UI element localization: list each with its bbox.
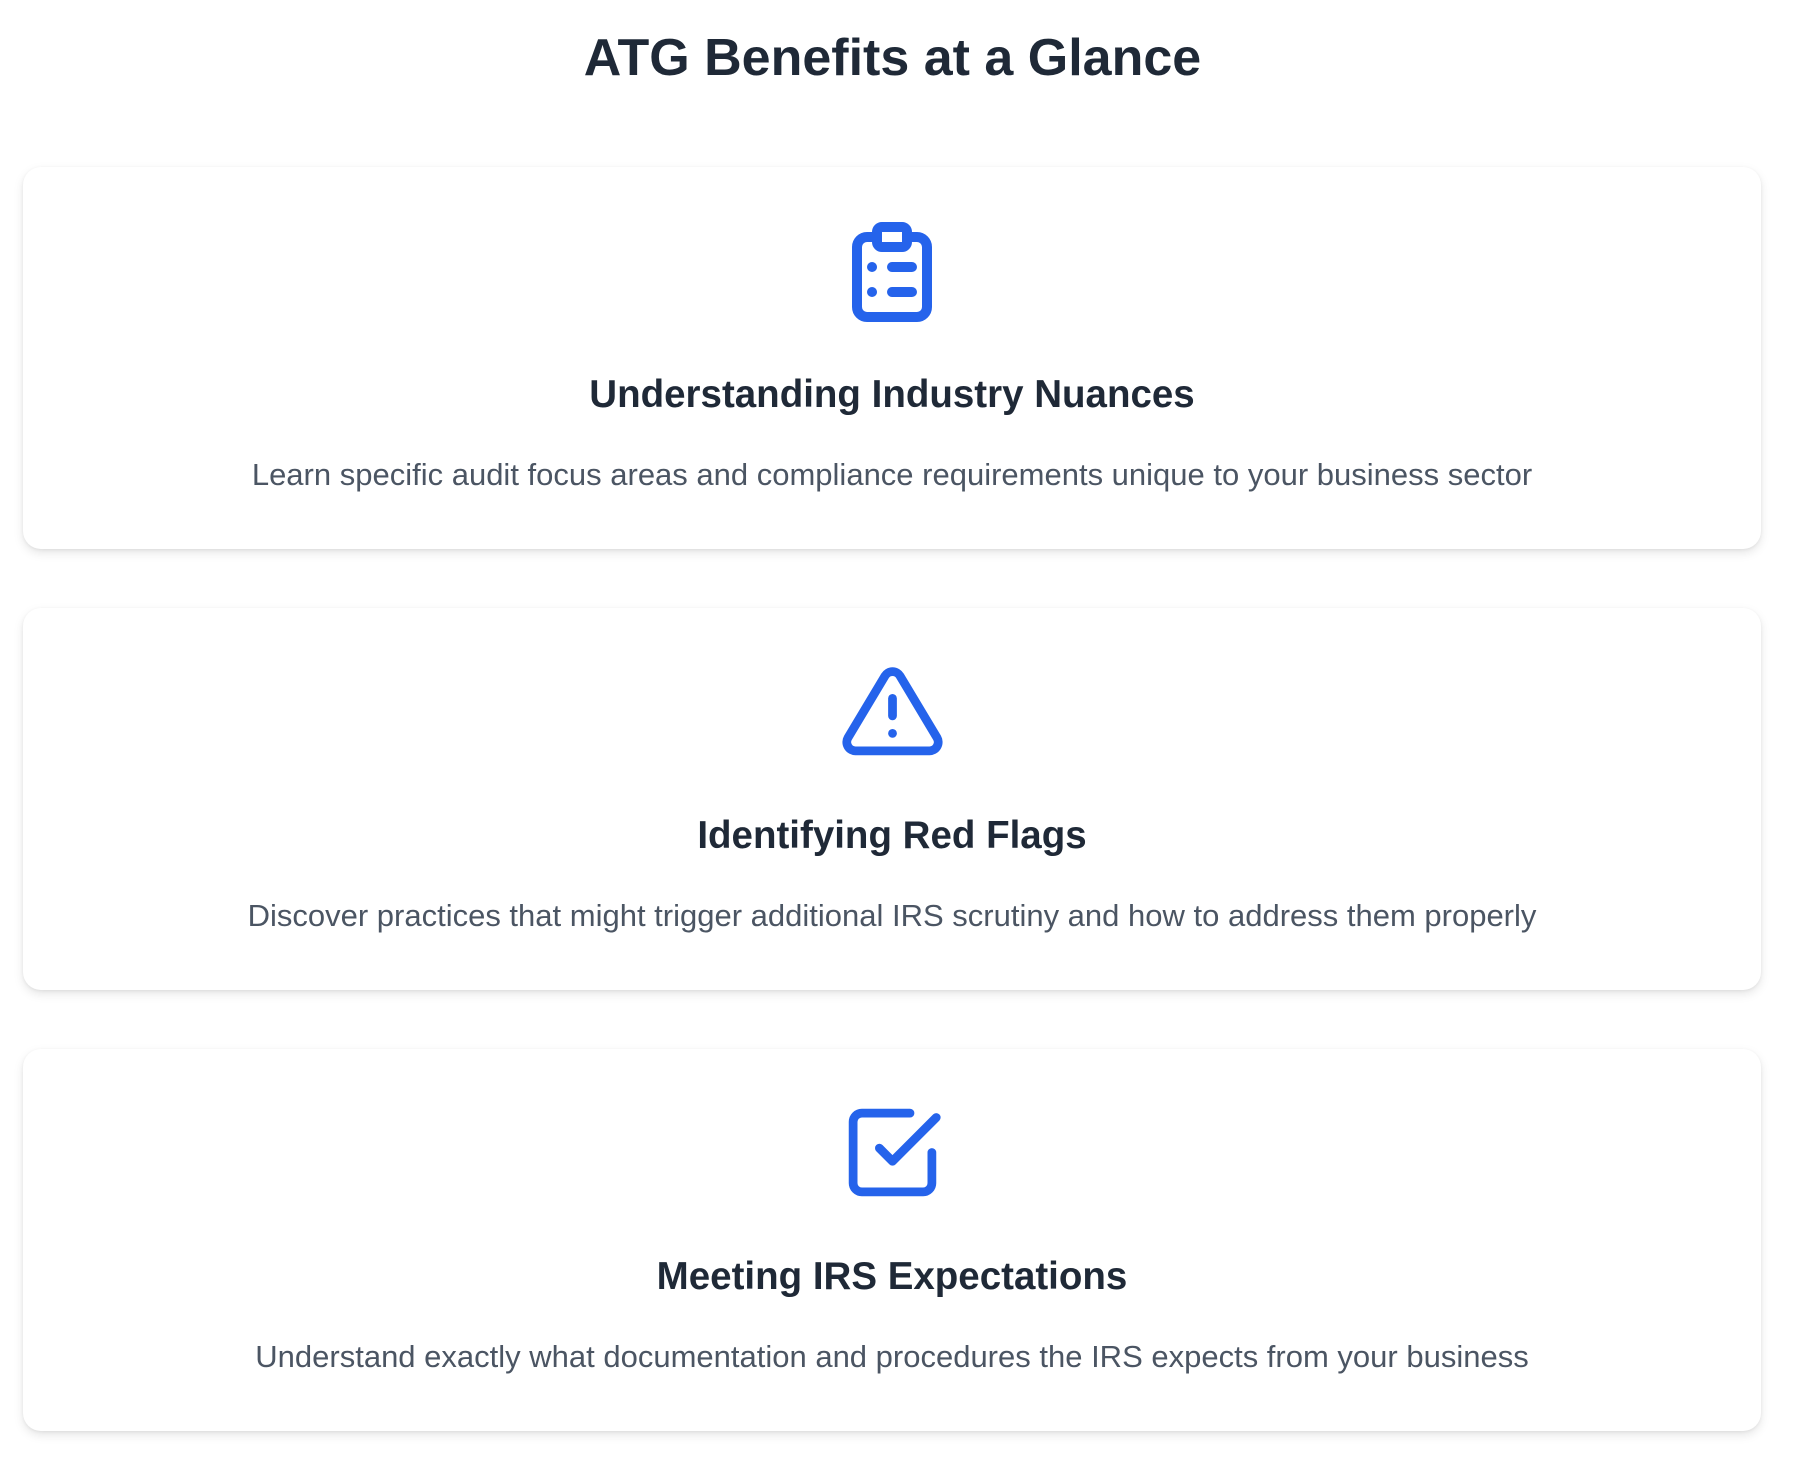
title: ATG Benefits at a Glance [584,29,1201,87]
heading: Identifying Red Flags [697,814,1087,857]
icon: check square [848,1108,941,1196]
panel: irs expectations [23,1049,1761,1431]
description: Learn specific audit focus areas and compliance requirements unique to your business sector [252,457,1532,492]
icon: clipboard [852,222,932,322]
heading: Understanding Industry Nuances [589,373,1195,416]
icon: warning triangle [842,667,943,756]
panel: red flags [23,608,1761,990]
panel: industry nuances [23,167,1761,549]
description: Understand exactly what documentation and procedures the IRS expects from your business [255,1339,1529,1374]
heading: Meeting IRS Expectations [657,1255,1127,1298]
description: Discover practices that might trigger additional IRS scrutiny and how to address them properly [248,898,1536,933]
